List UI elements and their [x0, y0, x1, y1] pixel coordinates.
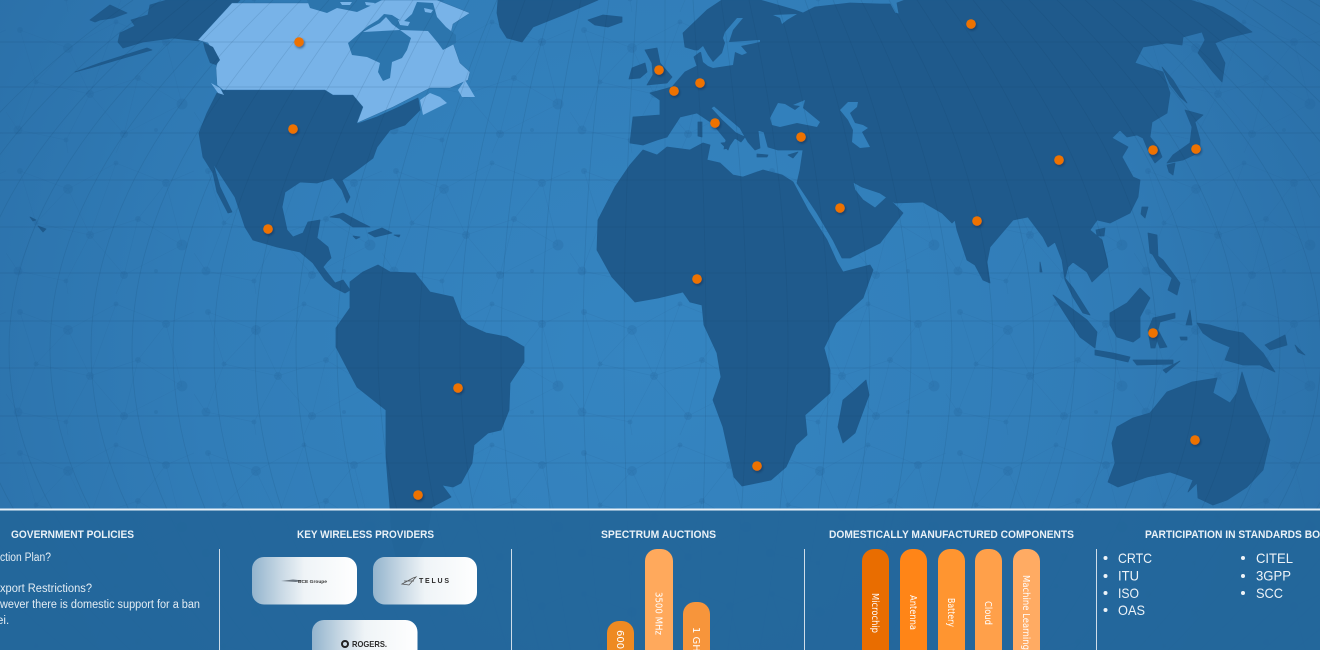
north america: united states, mexico and central america [199, 90, 420, 293]
bar: cloud: Cloud [982, 601, 993, 625]
alaska panhandle [203, 42, 220, 65]
logo card: telus [373, 557, 477, 604]
list: standards bodies column one: ITU [1118, 568, 1139, 584]
africa [597, 143, 873, 486]
islands: greenland, iceland, uk, ireland [497, 0, 672, 85]
list: standards bodies column two [1241, 550, 1293, 601]
section: key wireless providers [252, 529, 477, 650]
bar: microchip: Microchip [869, 593, 880, 633]
bottom info panel [0, 508, 1320, 650]
section: spectrum auctions [601, 529, 716, 650]
column dividers [220, 549, 1096, 650]
hudson bay and arctic channels [307, 0, 456, 81]
islands: southeast asia [1040, 250, 1305, 373]
logo card: rogers [312, 620, 418, 650]
section: participation in standards bodies [1104, 529, 1320, 618]
bar: battery: Battery [945, 598, 956, 627]
logo card: bce [252, 557, 357, 604]
policy text: xport Restrictions? [0, 583, 92, 595]
logo card: rogers: ROGERS. [352, 639, 387, 649]
policy text: wever there is domestic support for a ban [0, 599, 200, 611]
policy text [0, 552, 200, 627]
policy text: ction Plan? [0, 552, 51, 564]
logo card: telus: TELUS [419, 578, 449, 585]
list: standards bodies column one: OAS [1118, 602, 1145, 618]
country markers [263, 19, 1201, 500]
canada highlighted [198, 0, 470, 123]
north america: alaska [75, 0, 240, 72]
australia [1108, 372, 1270, 505]
panel background [0, 509, 1320, 650]
heading: government policies: GOVERNMENT POLICIES [11, 529, 134, 541]
south america [336, 265, 524, 565]
heading: domestically manufactured components: DOMESTICALLY MANUFACTURED COMPONENTS [829, 529, 1074, 541]
canadian islands and maritimes [211, 2, 475, 115]
list: standards bodies column one [1104, 550, 1152, 618]
bar: antenna: Antenna [907, 595, 918, 630]
bar: battery [938, 549, 965, 650]
bar: cloud [975, 549, 1002, 650]
islands: mediterranean, madagascar, caribbean [30, 122, 869, 443]
heading: spectrum auctions: SPECTRUM AUCTIONS [601, 529, 716, 541]
islands: east asia [1096, 67, 1203, 257]
bar: microchip [862, 549, 889, 650]
list: standards bodies column one: ISO [1118, 585, 1139, 601]
bar: 3500 MHz: 3500 MHz [652, 592, 664, 635]
section: government policies [0, 529, 200, 627]
inland seas [695, 14, 870, 148]
list: standards bodies column two: SCC [1256, 585, 1283, 601]
list: standards bodies column two: 3GPP [1256, 568, 1291, 584]
section: domestically manufactured components [829, 529, 1074, 650]
heading: key wireless providers: KEY WIRELESS PROVIDERS [297, 529, 434, 541]
list: standards bodies column two: CITEL [1256, 550, 1293, 566]
list: standards bodies column one: CRTC [1118, 550, 1152, 566]
bar: machine learning [1013, 549, 1040, 650]
eurasia [630, 0, 1252, 315]
logo card: bce: BCE Groupe [298, 579, 328, 584]
bar: antenna [900, 549, 927, 650]
